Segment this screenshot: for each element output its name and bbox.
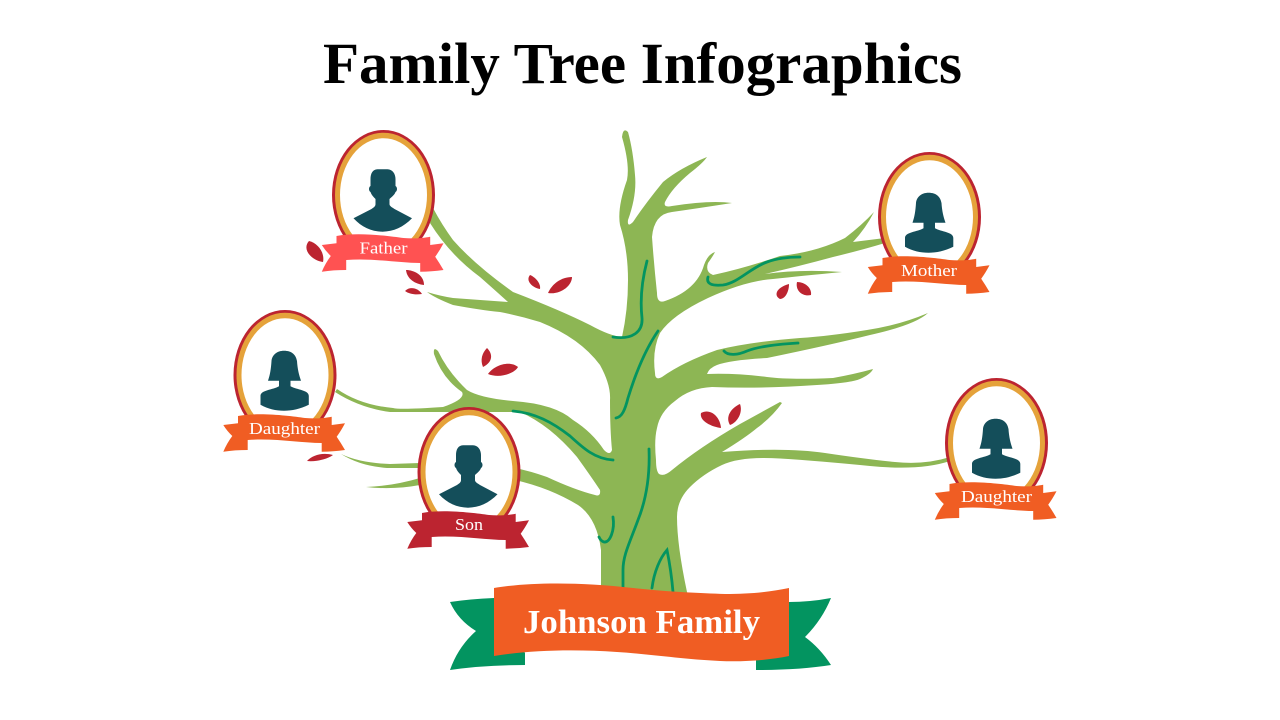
leaf — [548, 277, 572, 293]
trunk bark lines — [513, 257, 800, 592]
frame — [945, 378, 1048, 508]
frame — [878, 152, 981, 282]
title: Family Tree Infographics — [323, 31, 962, 96]
portrait: right daughter — [935, 378, 1056, 520]
ribbon — [407, 511, 529, 549]
portrait: father — [322, 130, 444, 272]
portrait: mother — [868, 152, 990, 294]
leaf — [701, 411, 721, 428]
leaf — [307, 454, 333, 461]
ribbon — [322, 234, 444, 272]
label: Father — [359, 238, 408, 258]
ribbon — [868, 256, 990, 294]
leaf — [728, 404, 741, 425]
female silhouette — [905, 193, 953, 253]
portrait: son — [407, 407, 529, 549]
label: Mother — [901, 261, 957, 280]
tree trunk and branches — [335, 130, 950, 600]
label: Daughter — [249, 419, 320, 438]
banner left tail — [450, 598, 525, 670]
frame — [418, 407, 520, 537]
male silhouette — [354, 169, 412, 232]
ribbon — [223, 414, 345, 452]
banner centre — [494, 584, 789, 661]
lower left twigs — [341, 454, 420, 488]
leaf — [406, 270, 424, 285]
female silhouette — [260, 351, 309, 411]
frame — [332, 130, 435, 260]
label: Son — [455, 515, 484, 534]
female silhouette — [972, 419, 1020, 479]
leaves — [306, 241, 811, 461]
leaf — [777, 284, 789, 299]
leaf — [528, 275, 540, 289]
tree — [335, 130, 950, 600]
leaf — [405, 288, 422, 294]
leaf — [306, 241, 323, 262]
ribbon — [935, 482, 1056, 520]
banner text: Johnson Family — [523, 604, 760, 641]
frame — [234, 310, 336, 440]
family name banner — [450, 584, 831, 670]
leaf — [488, 364, 518, 376]
portrait: left daughter — [223, 310, 345, 452]
leaf — [797, 282, 811, 295]
leaf — [482, 348, 491, 367]
label: Daughter — [961, 487, 1032, 506]
male silhouette — [439, 445, 498, 508]
banner right tail — [756, 598, 831, 670]
